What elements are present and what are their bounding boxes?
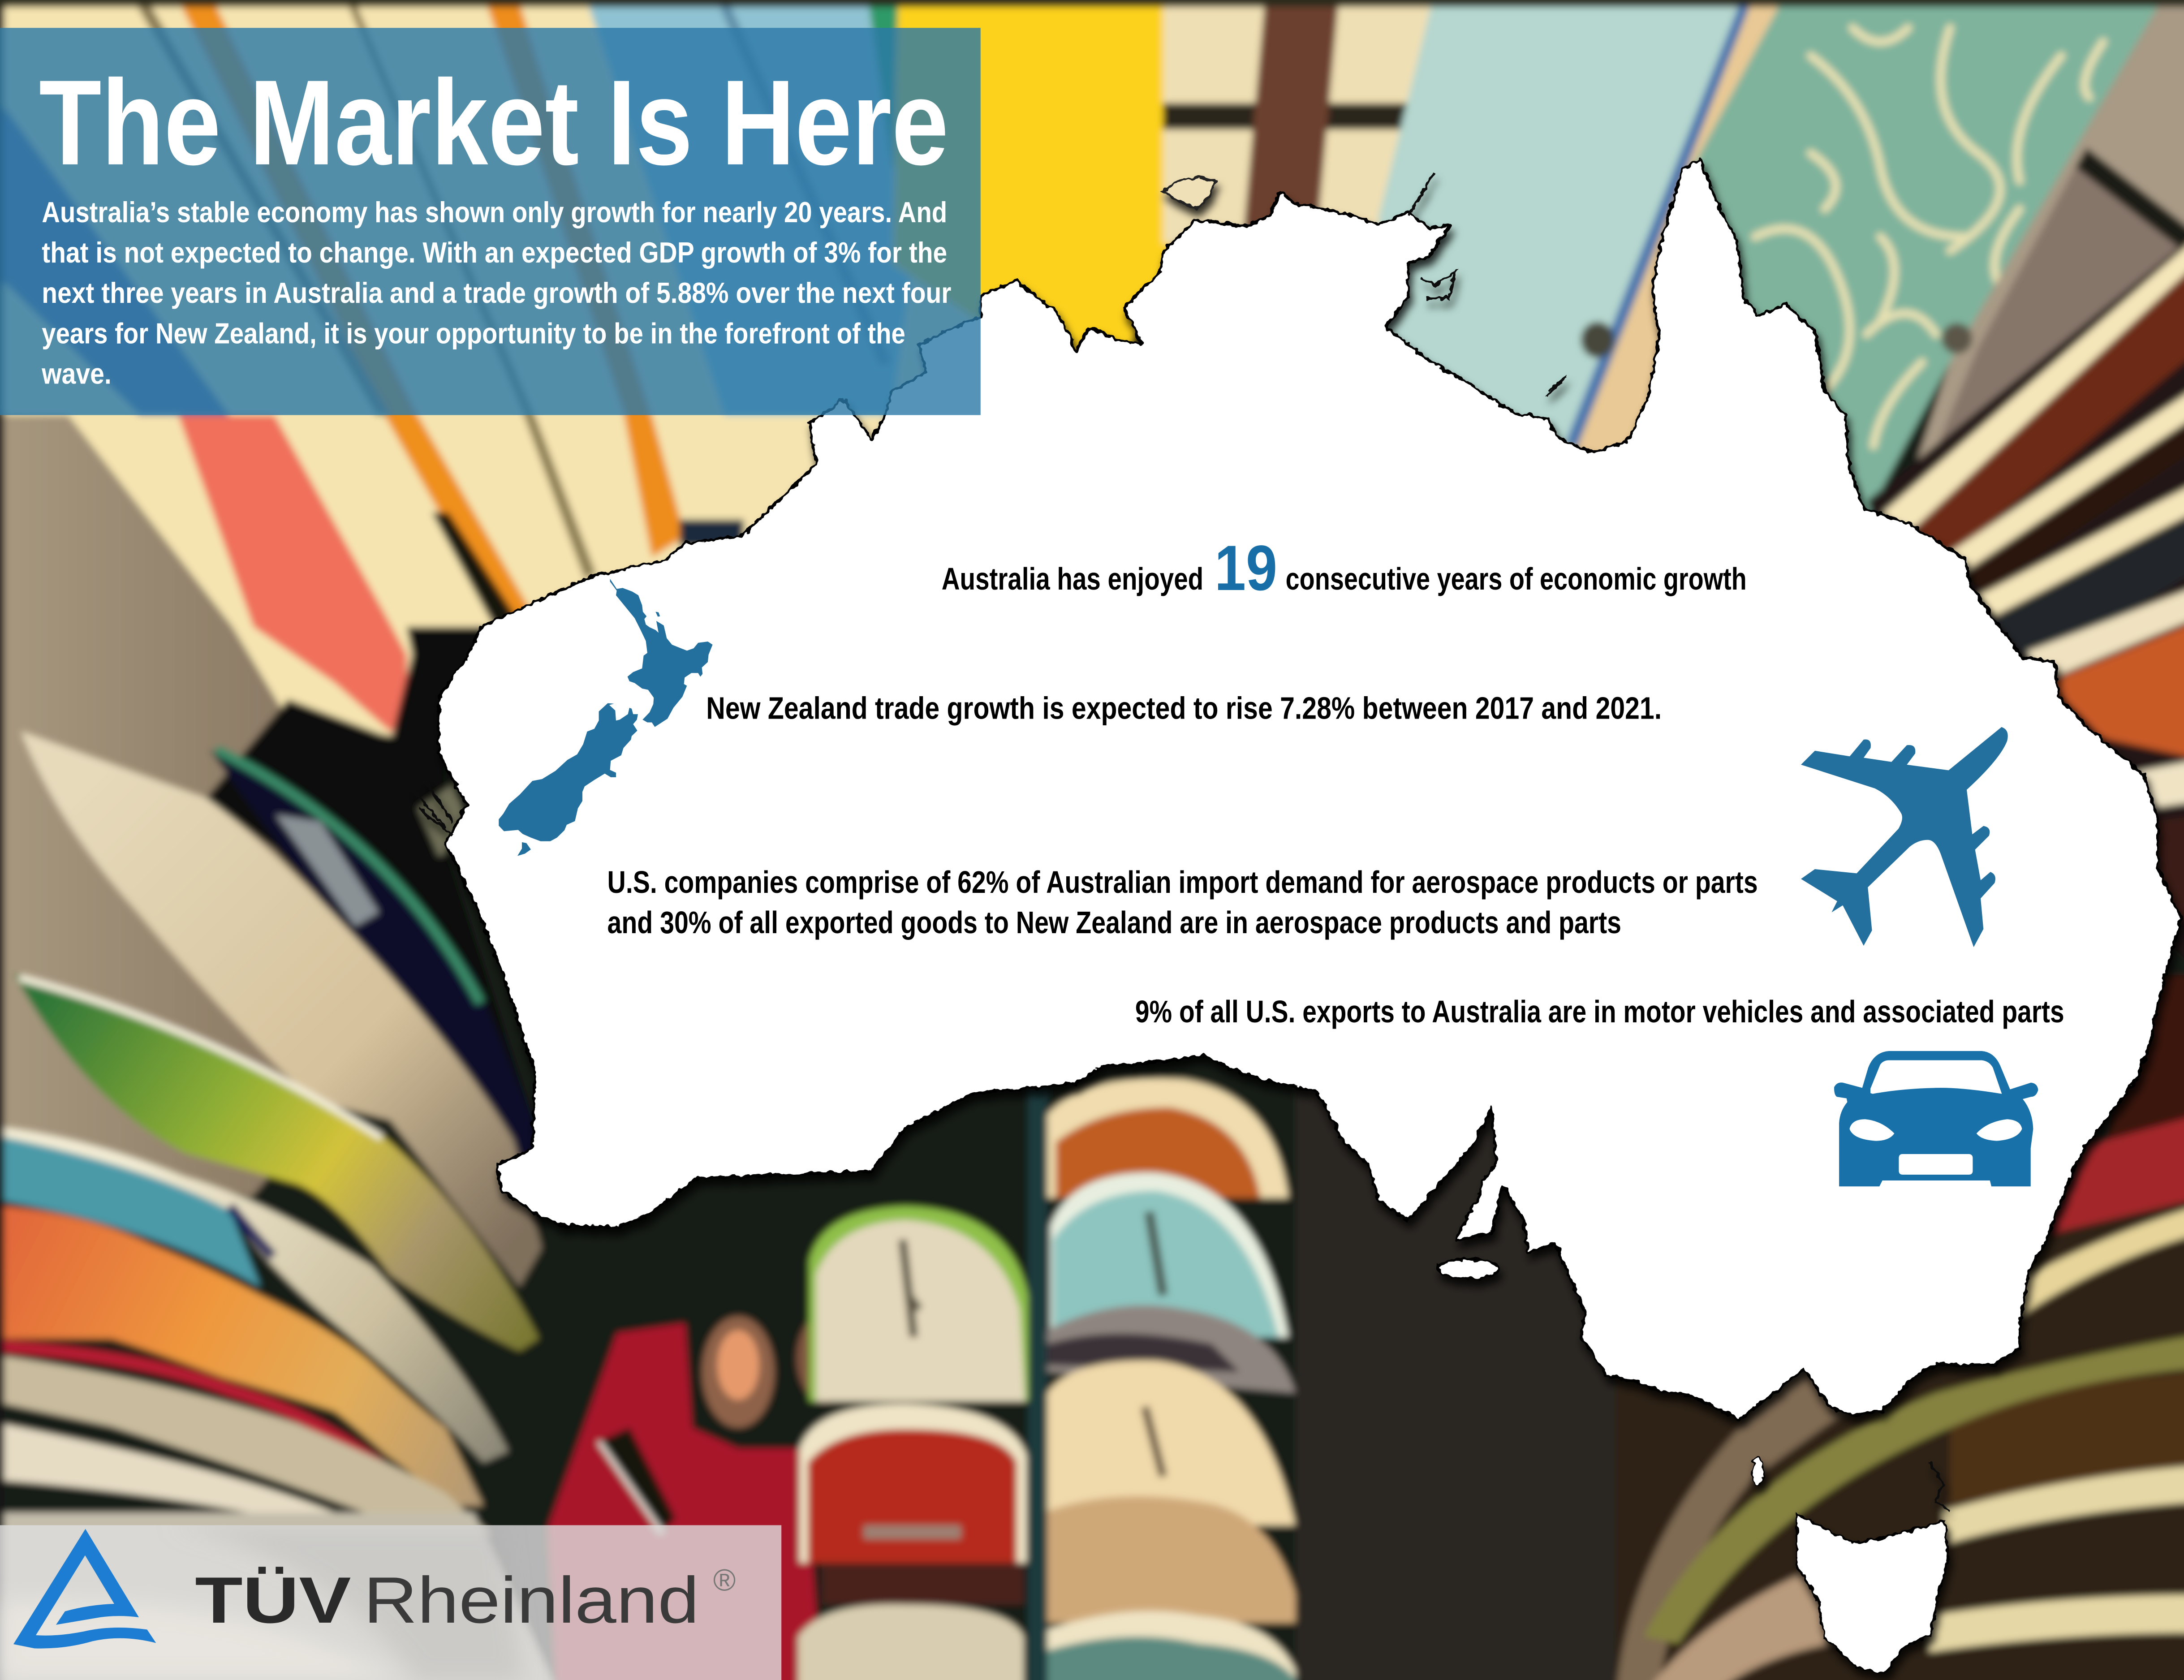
boards: dark board with green stripe xyxy=(209,750,536,1226)
stat: 19 years of growth xyxy=(942,533,1747,604)
intro paragraph xyxy=(41,196,951,390)
boards: left wall and pink board tip xyxy=(0,415,540,1240)
person in red shirt xyxy=(549,1314,853,1680)
icon: New Zealand map xyxy=(499,579,713,856)
boards: cream board with brown stripe xyxy=(1163,0,1448,244)
stat: aerospace share: and 30% of all exported goods to New Zealand are in aerospace products and parts xyxy=(607,905,1621,940)
islands: gulf and strait outlines xyxy=(411,173,1950,1511)
intro paragraph: that is not expected to change. With an expected GDP growth of 3% for the xyxy=(42,236,947,269)
stat: 19 years of growth: consecutive years of economic growth xyxy=(1286,561,1747,596)
stat: aerospace share: U.S. companies comprise of 62% of Australian import demand for aerospace products or parts xyxy=(607,865,1758,900)
stat: 19 years of growth: 19 xyxy=(1215,533,1277,604)
stat: New Zealand trade growth: New Zealand trade growth is expected to rise 7.28% between 2017 and 2021. xyxy=(706,690,1662,725)
logo wordmark: TÜV xyxy=(195,1564,351,1637)
boards: centre right column xyxy=(1047,1078,1616,1680)
logo wordmark: Rheinland xyxy=(363,1564,699,1637)
boards: green and yellow board xyxy=(14,974,539,1351)
icon: car xyxy=(1834,1051,2038,1186)
boards: centre left column xyxy=(798,1086,1047,1680)
panel: TÜV Rheinland logo xyxy=(0,1525,781,1680)
boards: pale blue board xyxy=(1379,0,1755,452)
boards: khaki board xyxy=(0,1354,490,1535)
boards: red edge band xyxy=(0,1345,418,1497)
boards: top left cream boards xyxy=(0,0,1003,738)
boards: orange board xyxy=(0,1205,483,1506)
stat: aerospace share xyxy=(607,865,1758,940)
boards: lowest cream board xyxy=(0,1421,365,1532)
island: Kangaroo Island xyxy=(1438,1259,1499,1279)
boards: tan board and blue stripe xyxy=(1566,0,1797,474)
icon: logo triangle xyxy=(13,1529,156,1649)
boards: right side striped boards xyxy=(1866,230,2184,1240)
island: Tasmania xyxy=(1797,1514,1949,1674)
boards: teal board xyxy=(0,1131,260,1287)
boards: lower right curved boards xyxy=(1616,1198,2184,1680)
panel: intro header xyxy=(0,28,981,415)
boards: cream board with navy mark xyxy=(0,1125,508,1463)
intro paragraph: next three years in Australia and a trade growth of 5.88% over the next four xyxy=(42,276,951,309)
map: Australia silhouette xyxy=(411,160,2181,1674)
island: Melville Island xyxy=(1163,178,1216,209)
boards: large cream board xyxy=(21,731,542,1287)
boards: taupe wall upper right xyxy=(1894,0,2184,529)
stat: 19 years of growth: Australia has enjoyed xyxy=(942,561,1203,596)
intro paragraph: Australia’s stable economy has shown only growth for nearly 20 years. And xyxy=(42,196,947,228)
boards: green marbled board xyxy=(1693,0,2170,543)
intro paragraph: wave. xyxy=(41,358,112,390)
mainland Australia xyxy=(439,160,2181,1419)
icon: airplane xyxy=(1801,727,2008,947)
island: King Island xyxy=(1752,1457,1763,1485)
registered mark: ® xyxy=(713,1564,736,1598)
title: The Market Is Here xyxy=(39,55,948,190)
boards: yellow board xyxy=(892,0,1173,362)
intro paragraph: years for New Zealand, it is your opportunity to be in the forefront of the xyxy=(42,317,905,349)
